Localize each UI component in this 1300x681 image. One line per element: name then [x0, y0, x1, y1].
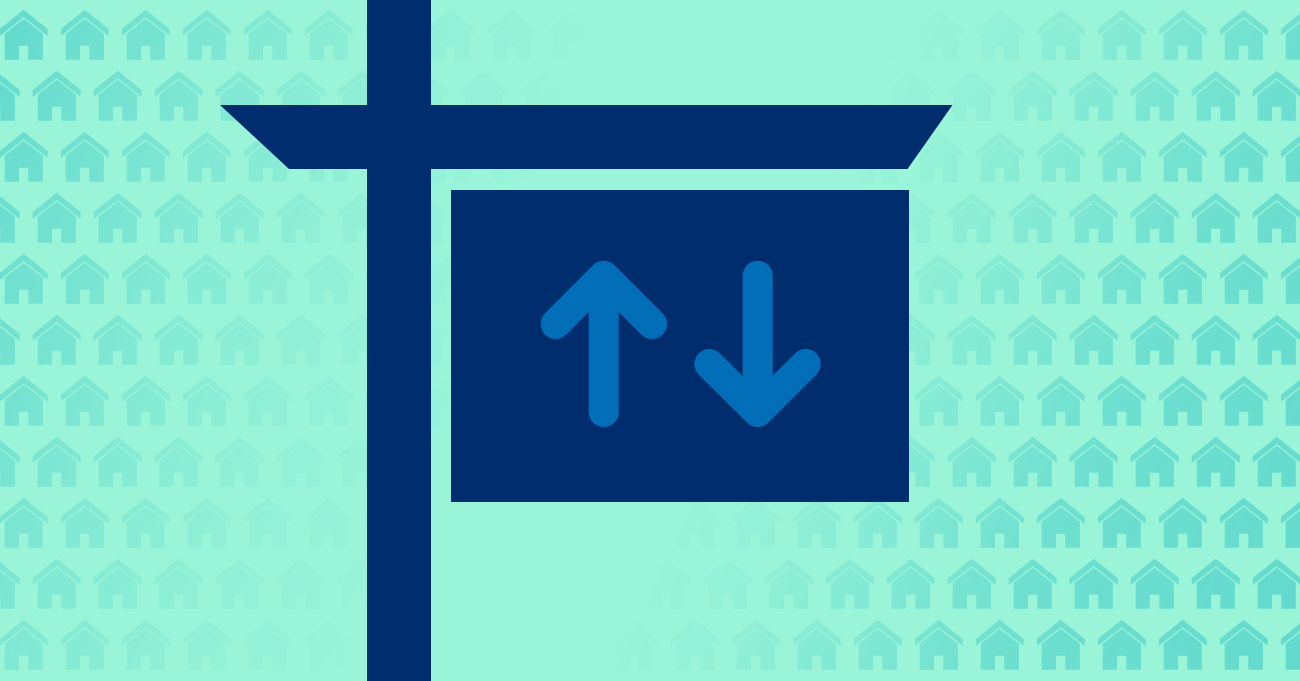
- sign post: [367, 0, 431, 681]
- house pattern: bottom right fading: [712, 10, 1300, 681]
- sign board: [451, 190, 909, 502]
- house pattern: top left fading: [0, 10, 367, 670]
- icon: down arrow: [709, 276, 806, 412]
- icon: up arrow: [556, 276, 652, 412]
- sign crossbar: [220, 105, 952, 169]
